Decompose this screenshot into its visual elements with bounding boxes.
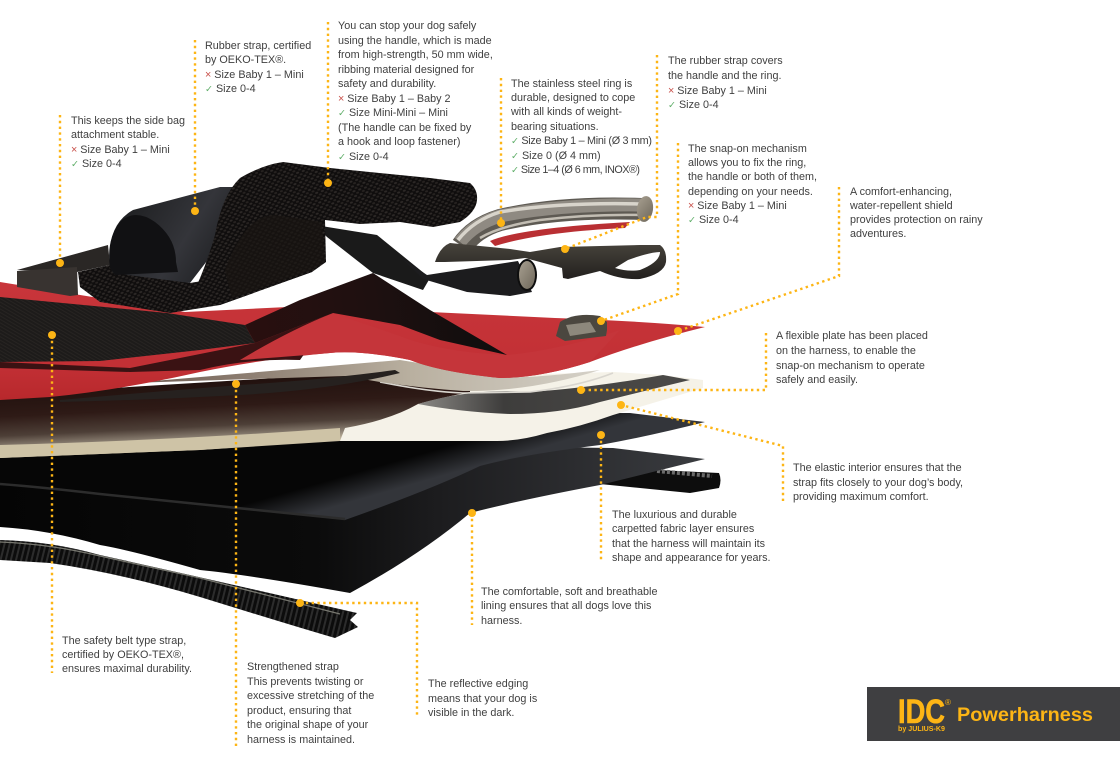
ring mid tone (460, 205, 642, 242)
plate silver line (380, 373, 613, 393)
ring lower highlight (480, 215, 640, 238)
callout: lining: The comfortable, soft and breathable (481, 586, 657, 598)
callout: side bag attachment: attachment stable. (71, 129, 159, 141)
rubber strap opening (109, 215, 178, 275)
ring fastener cap (517, 259, 537, 291)
ring highlight (458, 204, 642, 240)
red fold highlight (240, 313, 620, 378)
callout: lining: lining ensures that all dogs love this (481, 600, 652, 612)
callout: flexible plate: safely and easily. (776, 374, 858, 386)
reflective edging highlight (0, 542, 340, 614)
callout: rubber strap cover: The rubber strap covers (668, 55, 783, 67)
callout: strengthened strap: Strengthened strap (247, 661, 339, 673)
callout: strengthened strap: the original shape of your (247, 719, 369, 731)
callout: elastic interior: The elastic interior ensures that the (793, 462, 962, 474)
callout: carpeted fabric: that the harness will maintain its (612, 538, 766, 550)
callout: elastic interior (617, 401, 963, 503)
callout: side bag attachment (56, 115, 185, 267)
elastic interior side, brown to beige (0, 366, 470, 458)
red shield (0, 282, 705, 400)
callout: strengthened strap: excessive stretching of the (247, 690, 374, 702)
snap mechanism body (435, 243, 666, 279)
callout: handle: using the handle, which is made (338, 35, 492, 47)
buckle (17, 267, 78, 296)
callout: handle: × Size Baby 1 – Baby 2 (338, 93, 451, 105)
callout: handle: from high-strength, 50 mm wide, (338, 49, 493, 61)
red fold shadow (0, 313, 333, 372)
callout: rubber strap: ✓ Size 0-4 (205, 83, 256, 95)
callout: stainless steel ring: bearing situations. (511, 121, 599, 133)
stainless steel ring (458, 204, 642, 246)
callout: snap-on mechanism: ✓ Size 0-4 (688, 214, 739, 226)
flexible plate (418, 375, 690, 414)
callout: safety belt strap: ensures maximal durability. (62, 663, 192, 675)
ring end cap (635, 195, 655, 223)
callout: stainless steel ring: The stainless steel ring is (511, 78, 633, 90)
callout: strengthened strap (232, 380, 374, 746)
product name: Powerharness (957, 705, 1093, 726)
handle inner shadow (225, 215, 325, 298)
callout: reflective edging: means that your dog is (428, 693, 538, 705)
ring tube base (462, 208, 642, 246)
callout: handle: ribbing material designed for (338, 64, 475, 76)
beige edge (0, 428, 340, 458)
callout: handle: ✓ Size Mini-Mini – Mini (338, 107, 448, 119)
callout: carpeted fabric: carpetted fabric layer ensures (612, 523, 755, 535)
callout: flexible plate: A flexible plate has been placed (776, 330, 928, 342)
ring fastener cap face (519, 261, 535, 289)
callout: stainless steel ring: ✓ Size 1–4 (Ø 6 mm, INOX®) (511, 164, 640, 176)
handle (190, 162, 477, 305)
carpeted fabric layer (0, 413, 705, 520)
callout: rubber strap cover: the handle and the ring. (668, 70, 781, 82)
callout: safety belt strap: certified by OEKO-TEX®, (62, 649, 184, 661)
callout: strengthened strap: product, ensuring that (247, 705, 351, 717)
callout: flexible plate: snap-on mechanism to operate (776, 360, 925, 372)
dark fold of belt (245, 273, 507, 355)
black fabric at ring (400, 257, 532, 296)
callout: snap-on mechanism: × Size Baby 1 – Mini (688, 200, 787, 212)
callout: reflective edging: visible in the dark. (428, 707, 514, 719)
harness layers illustration (0, 162, 720, 638)
callout: water-repellent shield: adventures. (850, 228, 906, 240)
small snap on shield (556, 315, 607, 341)
callout: strengthened strap: This prevents twisting or (247, 676, 364, 688)
buckle rim (17, 245, 110, 272)
callout: stainless steel ring (497, 78, 652, 227)
thin dark layer (60, 370, 400, 402)
callout: side bag attachment: × Size Baby 1 – Mini (71, 144, 170, 156)
strap end ribs (657, 471, 712, 476)
callout: rubber strap cover: × Size Baby 1 – Mini (668, 85, 767, 97)
callout: handle: ✓ Size 0-4 (338, 151, 389, 163)
callout: rubber strap cover: ✓ Size 0-4 (668, 99, 719, 111)
callout: water-repellent shield: A comfort-enhancing, (850, 186, 952, 198)
callout: rubber strap: by OEKO-TEX®. (205, 54, 286, 66)
logo: registered mark: ® (945, 698, 951, 707)
callout: rubber strap: Rubber strap, certified (205, 40, 311, 52)
callout: lining (468, 509, 657, 627)
ring red backing (490, 222, 630, 246)
callout: flexible plate: on the harness, to enable the (776, 345, 916, 357)
snap loop opening (615, 252, 660, 271)
callout: snap-on mechanism (597, 143, 817, 325)
callout: side bag attachment: ✓ Size 0-4 (71, 158, 122, 170)
lining layer (0, 440, 705, 593)
light strip under red (130, 360, 600, 391)
callout: water-repellent shield: provides protection on rainy (850, 214, 983, 226)
callout: strengthened strap: harness is maintained. (247, 734, 355, 746)
safety belt strap (0, 297, 255, 362)
callout: safety belt strap (48, 331, 192, 675)
callout: snap-on mechanism: depending on your needs. (688, 186, 813, 198)
callout: handle: safety and durability. (338, 78, 436, 90)
callout: stainless steel ring: ✓ Size 0 (Ø 4 mm) (511, 150, 601, 162)
carpet edge line (0, 484, 345, 519)
rubber strap (109, 187, 233, 283)
callout: stainless steel ring: durable, designed to cope (511, 92, 635, 104)
callout: water-repellent shield: water-repellent shield (849, 200, 953, 212)
webbing under handle (78, 262, 315, 313)
logo panel (867, 687, 1120, 741)
callout: elastic interior: strap fits closely to your dog’s body, (793, 477, 963, 489)
callout: safety belt strap: The safety belt type strap, (62, 635, 186, 647)
logo: by Julius-K9: by JULIUS-K9 (898, 724, 945, 733)
callout: handle: (The handle can be fixed by (338, 122, 472, 134)
small snap highlight (566, 322, 596, 336)
callout: side bag attachment: This keeps the side bag (71, 115, 185, 127)
callout: handle: You can stop your dog safely (338, 20, 477, 32)
strengthened strap end (600, 470, 720, 493)
callout: carpeted fabric: The luxurious and durable (612, 509, 737, 521)
callout: rubber strap (191, 40, 311, 215)
logo: IDC: IDC (898, 693, 945, 731)
callout: snap-on mechanism: The snap-on mechanism (688, 143, 807, 155)
elastic interior white layer (330, 372, 703, 441)
callout: handle: a hook and loop fastener) (338, 136, 460, 148)
callout: snap-on mechanism: allows you to fix the ring, (688, 157, 806, 169)
callout: stainless steel ring: ✓ Size Baby 1 – Mini (Ø 3 mm) (511, 135, 652, 147)
callout: water-repellent shield (674, 186, 983, 335)
callout: reflective edging (296, 599, 538, 719)
callout: stainless steel ring: with all kinds of weight- (510, 106, 622, 118)
callout: rubber strap: × Size Baby 1 – Mini (205, 69, 304, 81)
reflective edging (0, 540, 358, 638)
strap behind handle (315, 225, 430, 290)
callout: rubber strap cover (561, 55, 783, 253)
callout: elastic interior: providing maximum comfort. (793, 491, 929, 503)
callout: lining: harness. (481, 615, 522, 627)
callout: reflective edging: The reflective edging (428, 678, 528, 690)
callout: snap-on mechanism: the handle or both of them, (688, 171, 817, 183)
callout: carpeted fabric (597, 431, 770, 564)
callout: flexible plate (577, 330, 928, 394)
callout: carpeted fabric: shape and appearance for years. (612, 552, 770, 564)
callout: handle (324, 20, 493, 187)
